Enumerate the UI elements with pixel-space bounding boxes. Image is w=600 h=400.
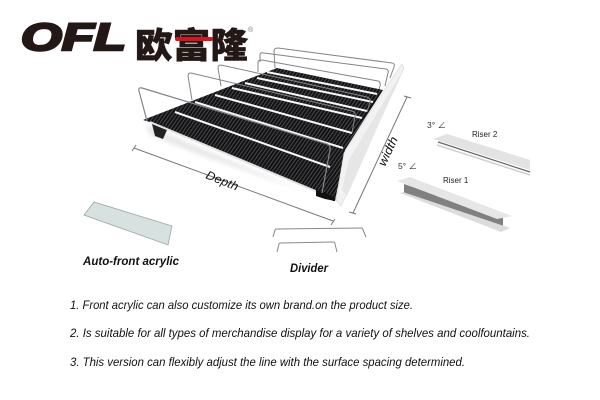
riser 1 top flange: [397, 177, 512, 219]
acrylic inner band: [342, 76, 400, 196]
riser 2 shadow line: [438, 142, 530, 172]
riser 2 lower flange: [437, 145, 530, 175]
width label: width: [375, 134, 401, 168]
tray shadow: [145, 124, 300, 190]
black ribbed surface: [143, 68, 383, 201]
front acrylic panel: [336, 64, 404, 206]
logo wordmark: OFL: [21, 17, 126, 59]
riser 1 lower flange: [400, 192, 510, 232]
white roller stripes: [175, 72, 377, 167]
divider wires: [273, 228, 366, 252]
logo chinese name: 欧富隆: [135, 26, 248, 66]
description line 1: 1. Front acrylic can also customize its own brand.on the product size.: [70, 298, 413, 312]
description line 3: 3. This version can flexibly adjust the line with the surface spacing determined.: [70, 355, 465, 369]
width dimension line: [349, 96, 411, 214]
description line 2: 2. Is suitable for all types of merchandise display for a variety of shelves and coolfountains.: [69, 326, 530, 340]
description text: [69, 298, 530, 369]
acrylic label: Auto-front acrylic: [82, 256, 180, 268]
riser 2 flange: [433, 134, 530, 170]
riser 1 part: [397, 177, 512, 232]
black corner block: [316, 190, 335, 201]
divider label: Divider: [290, 263, 328, 275]
riser 1 web: [404, 184, 503, 230]
riser 1 label: Riser 1: [443, 176, 469, 185]
depth label: Depth: [204, 168, 241, 194]
depth dimension line: [132, 145, 335, 225]
auto-front acrylic piece: [84, 202, 172, 245]
riser 2 label: Riser 2: [472, 130, 498, 139]
silver front rail: [150, 122, 318, 192]
support foot: [152, 124, 167, 139]
wire dividers behind tray: [258, 48, 394, 96]
logo registered mark: ®: [248, 26, 254, 34]
product: roller shelf tray: [139, 48, 404, 206]
logo: OFL brand: [21, 17, 254, 66]
3 degree label: 3° ∠: [427, 120, 446, 130]
5 degree label: 5° ∠: [398, 161, 417, 171]
riser 2 part: [433, 134, 530, 175]
wire dividers front: [139, 65, 370, 193]
logo red accent: [175, 37, 213, 41]
